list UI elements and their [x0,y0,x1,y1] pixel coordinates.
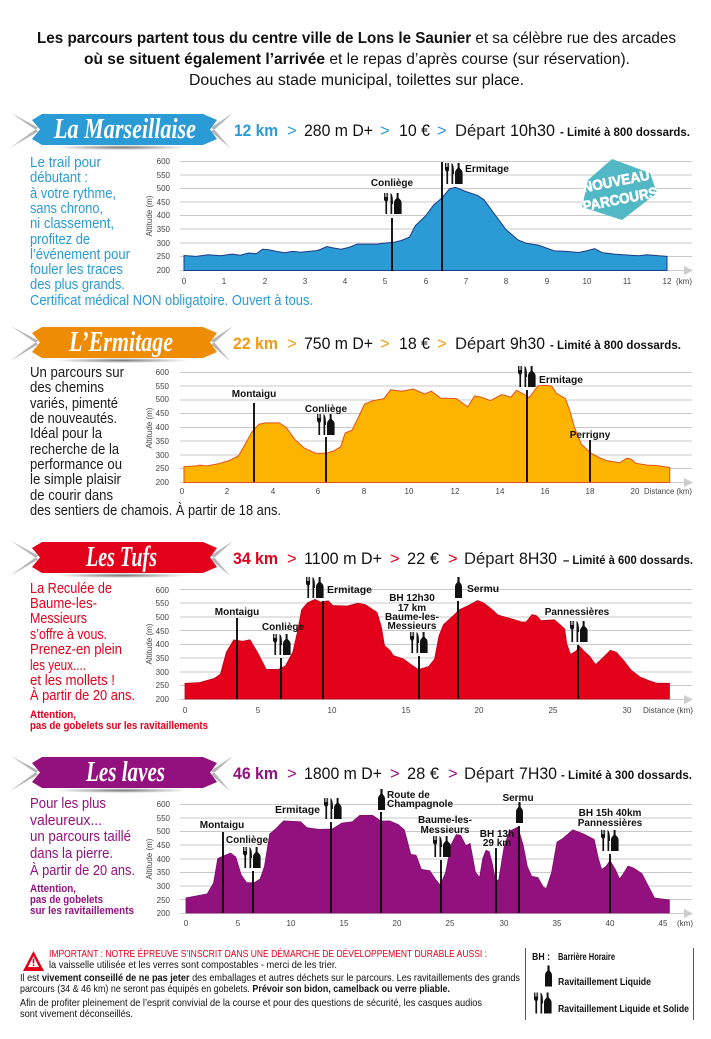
description: les yeux.... [30,658,86,674]
elevation chart: 46 km: 450 [157,841,171,850]
description [30,365,281,519]
marker: Pannessières: BH 15h 40km [579,808,642,819]
elevation chart: 12 km: Altitude (m) [145,195,154,236]
elevation chart: 46 km: 0 [184,919,189,928]
description [30,581,135,704]
course facts: > [390,765,400,783]
elevation chart: 12 km: 450 [157,198,171,207]
marker: Conliège: Conliège [371,178,414,189]
course facts: 10 € [399,122,430,140]
course facts: > [380,122,390,140]
warning note [30,709,208,732]
description: performance ou [30,457,122,473]
elevation chart: 12 km: 6 [424,277,429,286]
badge: nouveau parcours: PARCOURS [581,185,659,215]
notice text: IMPORTANT : NOTRE ÉPREUVE S’INSCRIT DANS UNE DÉMARCHE DE DÉVELOPPEMENT DURABLE AUSSI : [49,947,487,960]
elevation chart: 12 km [145,157,693,286]
elevation chart: 22 km: 12 [451,487,460,496]
elevation chart: 22 km: 200 [156,478,170,487]
marker: Montaigu: Montaigu [215,607,259,618]
banner: La Marseillaise [10,113,233,150]
marker: Route de Champagnole: Route de [387,790,430,801]
notice text: parcours (34 & 46 km) ne seront pas équipés en gobelets. Prévoir son bidon, camelback ou verre pliable. [20,983,450,995]
elevation chart: 22 km: 2 [225,487,230,496]
description: Certificat médical NON obligatoire. Ouvert à tous. [30,293,313,309]
elevation chart: 34 km: 10 [328,706,337,715]
marker: Sermu: Sermu [467,584,499,595]
elevation chart: 12 km: 3 [303,277,308,286]
description: recherche de la [30,442,120,458]
description: de nouveautés. [30,411,117,427]
marker: Baume-les-Messieurs: BH 12h30 [389,593,435,604]
description [30,155,313,309]
elevation chart: 46 km: 25 [446,919,455,928]
marker: Ermitage [518,366,583,482]
description: Messieurs [30,611,87,627]
marker: BH 13h: 29 km [483,838,511,849]
description: débutant : [30,170,88,186]
elevation chart: 34 km: 25 [549,706,558,715]
elevation chart: 46 km: 5 [236,919,241,928]
course facts: - Limité à 800 dossards. [560,125,690,139]
course facts: > [448,765,458,783]
course facts [233,335,681,353]
course facts: > [437,122,447,140]
elevation chart: 12 km: 2 [263,277,268,286]
description: de courir dans [30,488,113,504]
course facts: – Limité à 600 dossards. [563,553,693,567]
elevation chart: 34 km: 20 [475,706,484,715]
elevation chart: 34 km: 15 [402,706,411,715]
marker: Conliège [305,404,348,482]
elevation chart: 46 km: 400 [157,855,171,864]
course facts: > [448,550,458,568]
elevation chart: 12 km: 5 [383,277,388,286]
marker: Ermitage [442,162,509,271]
course facts: 1100 m D+ [304,550,382,568]
elevation chart: 22 km: 500 [156,395,170,404]
marker: Route de Champagnole: Champagnole [387,799,453,810]
elevation chart: 34 km: 0 [183,706,188,715]
course facts [233,550,693,568]
course facts: > [380,335,390,353]
banner: La Marseillaise: La Marseillaise [53,114,196,145]
description: le simple plaisir [30,472,121,488]
elevation chart: 12 km: (km) [676,277,692,286]
marker: BH 13h [480,829,514,913]
marker: Pannessières [545,607,610,699]
legend: Ravitaillement Liquide [558,977,651,988]
marker: Perrigny: Perrigny [570,430,611,441]
elevation chart: 22 km: 250 [156,464,170,473]
elevation chart: 22 km [145,366,693,496]
warning note: Attention, [30,709,76,721]
marker: Baume-les-Messieurs: Baume-les- [385,612,439,623]
description: Le trail pour [30,155,101,171]
description: À partir de 20 ans. [30,687,135,704]
marker: Conliège: Conliège [305,404,348,415]
intro text: où se situent également l’arrivée et le repas d’après course (sur réservation). [84,51,630,68]
course facts [233,765,692,783]
elevation chart: 12 km: 200 [157,266,171,275]
legend [526,948,694,1020]
important notice [20,947,520,1020]
description: profitez de [30,232,90,248]
marker: Pannessières: Pannessières [545,607,610,618]
description: ni classement, [30,216,114,232]
elevation chart: 22 km: 400 [156,423,170,432]
elevation chart: 22 km: 6 [316,487,321,496]
elevation chart: 22 km: 550 [156,382,170,391]
legend: Barrière Horaire [558,952,615,963]
elevation chart: 12 km: 8 [504,277,509,286]
panel: L'Ermitage [10,326,693,519]
elevation chart: 46 km: 35 [553,919,562,928]
marker: Montaigu: Montaigu [232,389,276,400]
description: variés, pimenté [30,396,118,412]
marker: Baume-les-Messieurs: Baume-les- [418,815,472,826]
banner: Les laves: Les laves [85,757,165,788]
elevation chart: 22 km: 300 [156,451,170,460]
elevation chart: 46 km: 200 [157,909,171,918]
elevation chart: 46 km: 500 [157,827,171,836]
elevation chart: 12 km: 550 [157,171,171,180]
description: sans chrono, [30,201,103,217]
marker: BH 13h: BH 13h [480,829,514,840]
elevation chart: 46 km: 40 [606,919,615,928]
course facts: - Limité à 800 dossards. [550,338,681,352]
course facts: 18 € [399,335,430,353]
description: Baume-les- [30,596,97,612]
course facts: > [287,335,297,353]
badge: nouveau parcours: NOUVEAU [581,168,651,196]
marker: Baume-les-Messieurs [385,593,439,699]
warning note: Attention, [30,883,76,895]
elevation chart: 46 km: (km) [677,919,693,928]
course facts [234,122,690,140]
course facts: 22 km [233,335,278,353]
elevation chart: 12 km: 400 [157,211,171,220]
description: Idéal pour la [30,426,103,442]
elevation chart: 22 km: 350 [156,437,170,446]
panel: Les laves [10,756,693,928]
course facts: Départ [455,122,505,140]
panel: Les Tufs [10,541,693,732]
elevation chart: 22 km: 14 [496,487,505,496]
elevation chart: 46 km: 15 [340,919,349,928]
marker: Ermitage: Ermitage [327,585,372,596]
elevation chart: 22 km: 18 [586,487,595,496]
elevation chart: 12 km: 7 [464,277,469,286]
course facts: Départ [464,550,514,568]
elevation chart: 34 km: 600 [156,586,170,595]
elevation chart: 34 km: Altitude (m) [145,623,154,664]
elevation chart: 34 km: 400 [156,640,170,649]
elevation chart: 46 km: 20 [393,919,402,928]
marker: Perrigny [570,430,611,482]
marker: Montaigu: Montaigu [200,820,244,831]
intro text [37,30,676,89]
elevation chart: 46 km: Altitude (m) [145,838,154,879]
elevation chart: 12 km: 9 [545,277,550,286]
elevation chart: 46 km: 600 [157,800,171,809]
icon: warning triangle [23,951,44,971]
notice text: Il est vivement conseillé de ne pas jeter des emballages et autres déchets sur le parcours. Les ravitaillements des grands [20,972,520,984]
marker: Baume-les-Messieurs [418,815,472,913]
warning note: pas de gobelets [30,894,103,906]
elevation chart: 34 km: 550 [156,599,170,608]
elevation chart: 12 km: 10 [583,277,592,286]
marker: Montaigu [215,607,259,699]
elevation chart: 34 km: 200 [156,695,170,704]
elevation chart: 34 km: 30 [623,706,632,715]
description: À partir de 20 ans. [30,862,135,879]
notice text: la vaisselle utilisée et les verres sont compostables - merci de les trier. [49,959,337,971]
description: Un parcours sur [30,365,124,381]
elevation chart: 12 km: 350 [157,225,171,234]
description: valeureux... [30,813,102,829]
intro text: Les parcours partent tous du centre ville de Lons le Saunier et sa célèbre rue des arcades [37,30,676,47]
course facts: 46 km [233,765,278,783]
elevation chart: 46 km [145,789,693,928]
description: des plus grands. [30,277,125,293]
marker: Conliège [371,178,414,271]
marker: Ermitage: Ermitage [275,805,320,816]
course facts: 9h30 [510,335,545,353]
elevation chart: 12 km: 12 [663,277,672,286]
elevation chart: 46 km: 350 [157,868,171,877]
notice text: Afin de profiter pleinement de l’esprit convivial de la course et pour des questions de sécurité, les casques audios [20,997,482,1009]
marker: Conliège [262,622,305,699]
marker: Baume-les-Messieurs: Messieurs [421,825,470,836]
marker: Baume-les-Messieurs: 17 km [398,603,426,614]
notice text [20,947,520,1020]
marker: Sermu [455,577,499,699]
course facts: Départ [464,765,514,783]
elevation chart: 12 km: 1 [222,277,227,286]
elevation chart: 46 km: 10 [287,919,296,928]
marker: Route de Champagnole [378,789,453,913]
elevation chart: 12 km: 0 [182,277,187,286]
legend: Ravitaillement Liquide et Solide [558,1004,689,1015]
course facts: 750 m D+ [304,335,373,353]
banner: Les laves [10,756,233,793]
elevation chart: 12 km: 500 [157,184,171,193]
course facts: 12 km [234,122,278,140]
elevation chart: 22 km: 4 [271,487,276,496]
banner: L'Ermitage [10,326,233,363]
elevation chart: 34 km: 250 [156,681,170,690]
banner: Les Tufs: Les Tufs [85,542,157,573]
elevation chart: 34 km: 300 [156,668,170,677]
elevation chart: 22 km: Distance (km) [644,487,692,496]
description: des chemins [30,380,104,396]
description [30,796,135,879]
course facts: 1800 m D+ [304,765,382,783]
elevation chart: 34 km: 500 [156,613,170,622]
elevation chart: 12 km: 600 [157,157,171,166]
description: et les mollets ! [30,673,115,689]
elevation chart: 34 km: 5 [256,706,261,715]
course facts: > [287,765,297,783]
elevation chart: 22 km: 10 [405,487,414,496]
notice text: sont vivement déconseillés. [20,1008,133,1020]
elevation chart: 22 km: 600 [156,368,170,377]
course facts: > [437,335,447,353]
panel: La Marseillaise [10,113,693,309]
marker: Montaigu [232,389,276,482]
elevation chart: 22 km: 0 [180,487,185,496]
course facts: 34 km [233,550,278,568]
description: l’événement pour [30,247,130,263]
course facts: 7H30 [519,765,557,783]
legend: BH : [532,952,550,963]
description: La Reculée de [30,581,112,597]
course facts: 10h30 [510,122,555,140]
elevation chart: 46 km: 250 [157,896,171,905]
course facts: > [390,550,400,568]
course facts: 28 € [407,765,439,783]
elevation chart: 12 km: 11 [623,277,632,286]
course facts: > [287,122,297,140]
warning note [30,883,134,917]
marker: Pannessières: Pannessières [578,818,643,829]
elevation chart: 22 km: 16 [541,487,550,496]
elevation chart: 12 km: 250 [157,252,171,261]
course facts: 8H30 [519,550,557,568]
description: à votre rythme, [30,186,116,202]
elevation chart: 46 km: 550 [157,814,171,823]
badge: nouveau parcours [581,159,659,220]
intro text: Douches au stade municipal, toilettes sur place. [189,72,524,89]
elevation chart: 22 km: 450 [156,409,170,418]
marker: Pannessières [578,808,643,913]
elevation chart: 46 km: 45 [659,919,668,928]
course facts: > [287,550,297,568]
course facts: 280 m D+ [304,122,373,140]
elevation chart: 22 km: 8 [362,487,367,496]
elevation chart: 34 km [145,577,693,715]
marker: Conliège [226,835,269,913]
description: Prenez-en plein [30,642,122,658]
elevation chart: 34 km: Distance (km) [643,706,693,715]
marker: Sermu: Sermu [502,793,534,804]
course facts: 22 € [407,550,439,568]
description: dans la pierre. [30,846,113,862]
elevation chart: 12 km: 300 [157,239,171,248]
elevation chart: 34 km: 350 [156,654,170,663]
elevation chart: 22 km: Altitude (m) [145,407,154,448]
marker: Sermu [502,793,534,913]
description: un parcours taillé [30,829,131,845]
marker: Ermitage [275,798,342,913]
description: fouler les traces [30,262,123,278]
elevation chart: 46 km: 300 [157,882,171,891]
marker: Conliège: Conliège [262,622,305,633]
banner: Les Tufs [10,541,233,578]
description: s’offre à vous. [30,627,107,643]
marker: Montaigu [200,820,244,913]
marker: Ermitage [306,577,372,699]
marker: Conliège: Conliège [226,835,269,846]
course facts: Départ [455,335,505,353]
warning note: pas de gobelets sur les ravitaillements [30,720,208,732]
course facts: - Limité à 300 dossards. [561,768,692,782]
banner: L'Ermitage: L’Ermitage [68,327,173,358]
marker: Baume-les-Messieurs: Messieurs [388,621,437,632]
description: Pour les plus [30,796,106,812]
warning note: sur les ravitaillements [30,905,134,917]
marker: Ermitage: Ermitage [539,375,583,386]
elevation chart: 22 km: 20 [631,487,640,496]
elevation chart: 12 km: 4 [343,277,348,286]
elevation chart: 46 km: 30 [500,919,509,928]
marker: Ermitage: Ermitage [465,164,509,175]
description: des sentiers de chamois. À partir de 18 ans. [30,502,281,519]
elevation chart: 34 km: 450 [156,627,170,636]
